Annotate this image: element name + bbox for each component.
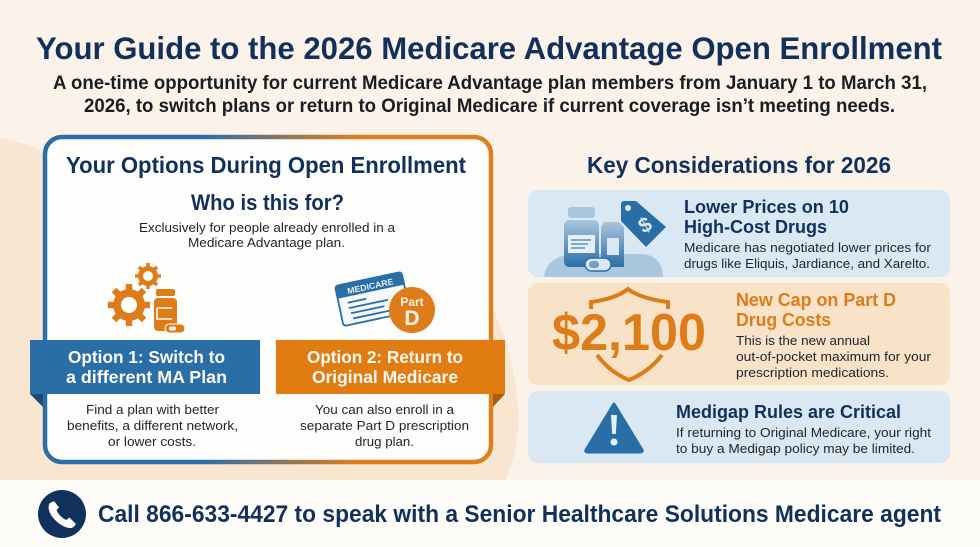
text: part D cap: Drug Costs <box>736 309 831 330</box>
call to action: Call 866-633-4427 to speak with a Senior Healthcare Solutions Medicare agent <box>98 501 941 528</box>
text: medigap: to buy a Medigap policy may be limited. <box>676 441 915 456</box>
ribbon: option 1: a different MA Plan <box>66 367 227 387</box>
text: medigap <box>676 401 931 456</box>
text: lower prices: drugs like Eliquis, Jardiance, and Xarelto. <box>684 256 930 271</box>
icon: medicine bottles and price tag <box>544 201 666 277</box>
icon: medicine bottles and price tag: $ <box>634 212 656 238</box>
icon: warning triangle <box>586 404 642 452</box>
text: part D cap: This is the new annual <box>736 333 870 348</box>
icon: medicare card with part D badge <box>335 272 435 333</box>
subtitle: A one-time opportunity for current Medicare Advantage plan members from January 1 to March 31, <box>53 72 927 94</box>
icon: medicare card with part D badge: Part <box>400 295 424 309</box>
icon: medicare card with part D badge: MEDICARE <box>346 276 395 296</box>
text: option 1 description <box>67 402 238 449</box>
footer bar <box>0 480 980 547</box>
text: option 1 description: or lower costs. <box>108 434 196 449</box>
ribbon: option 1: Option 1: Switch to <box>68 347 225 367</box>
subtitle <box>53 72 927 117</box>
panel: your options during open enrollment <box>30 137 505 462</box>
card: part D cap <box>528 283 950 385</box>
text: lower prices: Medicare has negotiated lower prices for <box>684 240 932 255</box>
text: eligibility: Exclusively for people already enrolled in a <box>139 220 396 235</box>
text: eligibility <box>139 220 396 250</box>
icon: phone <box>38 490 86 538</box>
text: lower prices: Lower Prices on 10 <box>684 196 849 217</box>
subtitle: 2026, to switch plans or return to Original Medicare if current coverage isn’t meeting needs. <box>84 95 895 117</box>
ribbon: option 1 <box>30 340 260 407</box>
text: option 1 description: Find a plan with better <box>86 402 220 417</box>
text: option 2 description: drug plan. <box>355 434 414 449</box>
ribbon: option 2: Original Medicare <box>312 367 458 387</box>
text: part D cap: prescription medications. <box>736 365 889 380</box>
icon: medicare card with part D badge: D <box>404 307 420 330</box>
panel heading: Your Options During Open Enrollment <box>66 152 466 178</box>
heading: key considerations: Key Considerations for 2026 <box>587 152 891 178</box>
text: medigap: Medigap Rules are Critical <box>676 401 901 422</box>
ribbon: option 2: Option 2: Return to <box>307 347 463 367</box>
text: lower prices <box>684 196 932 271</box>
text: eligibility: Medicare Advantage plan. <box>188 235 345 250</box>
text: option 2 description: separate Part D prescription <box>300 418 469 433</box>
card: lower prices <box>528 190 950 277</box>
icon: shield outline <box>591 289 668 380</box>
text: option 2 description: You can also enroll in a <box>315 402 455 417</box>
text: option 1 description: benefits, a different network, <box>67 418 238 433</box>
text: part D cap: New Cap on Part D <box>736 289 896 310</box>
text: option 2 description <box>300 402 469 449</box>
icon: gears and pill bottle <box>108 263 185 333</box>
text: medigap: If returning to Original Medicare, your right <box>676 425 931 440</box>
heading: who is this for: Who is this for? <box>191 190 344 215</box>
text: part D cap: out-of-pocket maximum for your <box>736 349 932 364</box>
title: Your Guide to the 2026 Medicare Advantage Open Enrollment <box>36 30 942 66</box>
card: medigap <box>528 391 950 463</box>
text: part D cap <box>736 289 932 380</box>
big number: $2,100 <box>552 304 706 362</box>
text: lower prices: High-Cost Drugs <box>684 216 827 237</box>
ribbon: option 2 <box>276 340 505 407</box>
